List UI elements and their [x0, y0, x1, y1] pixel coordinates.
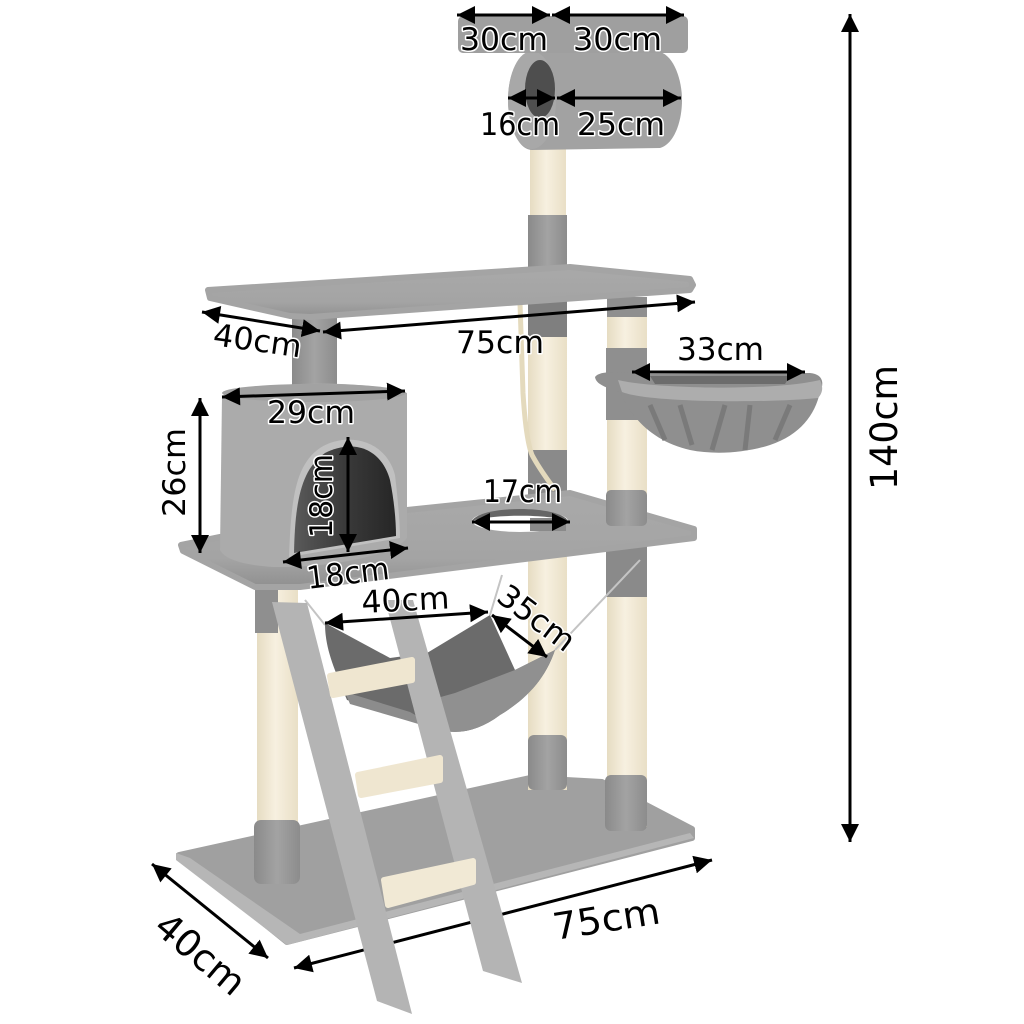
hole in platform: [472, 509, 568, 532]
upper support post: [292, 315, 337, 390]
right post upper collar: [606, 490, 647, 526]
dimension: top perch 30cm right: [552, 15, 684, 58]
dimension: door 18cm height: 18cm: [304, 454, 340, 538]
dimension: upper platform 40cm: [202, 312, 320, 365]
dimension: tunnel 25cm: [557, 98, 681, 143]
right post: [605, 297, 647, 831]
dimension: hammock 35cm: 35cm: [490, 578, 582, 659]
base platform: [176, 778, 694, 945]
tunnel perch: [508, 51, 682, 150]
ladder rung 2: [358, 758, 440, 795]
dimension: upper platform 75cm: [323, 302, 695, 361]
dimension: top perch 30cm left: 30cm: [460, 22, 548, 58]
middle platform: [181, 493, 694, 587]
dimension: total height 140cm: 140cm: [863, 365, 906, 490]
dimension: hammock 40cm: [325, 580, 488, 623]
dimension: hole 17cm: 17cm: [483, 474, 562, 510]
dimension: base 40cm: [146, 864, 268, 1004]
dimension: house 29cm: [222, 391, 405, 431]
dimension: basket 33cm: 33cm: [677, 332, 764, 368]
ladder: [272, 600, 522, 1014]
dimension: house 26cm: 26cm: [157, 428, 193, 517]
dimension: tunnel 25cm: 25cm: [577, 107, 665, 143]
upper platform: [208, 267, 693, 317]
dimension: tunnel 16cm: 16cm: [480, 107, 560, 143]
dimension: hammock 40cm: 40cm: [361, 580, 450, 621]
dimension: door 18cm height: [304, 437, 348, 552]
basket hammock: [595, 372, 822, 453]
ladder rung 3: [384, 861, 473, 905]
ladder rung 1: [330, 660, 412, 695]
top perch: [458, 16, 688, 53]
dimension: upper platform 75cm: 75cm: [456, 325, 544, 361]
rope: [520, 303, 555, 490]
dimension: door 18cm width: [283, 548, 408, 597]
dimension: house 29cm: 29cm: [267, 395, 355, 431]
left post: [254, 590, 300, 884]
cat tree: [176, 16, 822, 1014]
cat house: [220, 384, 407, 567]
strings: [305, 560, 640, 650]
dimension: top perch 30cm right: 30cm: [573, 22, 662, 58]
dimension: hole 17cm: [472, 474, 570, 522]
dimension: door 18cm width: 18cm: [305, 551, 391, 597]
dimension: base 75cm arrow: [294, 860, 712, 968]
top post: [528, 148, 567, 268]
dimension: upper platform 40cm: 40cm: [211, 317, 304, 365]
back centre post: [528, 300, 567, 790]
dimension: base 40cm: 40cm: [146, 904, 254, 1004]
fabric hammock: [325, 615, 555, 732]
dimension: base 75cm label: 75cm: [550, 890, 663, 949]
